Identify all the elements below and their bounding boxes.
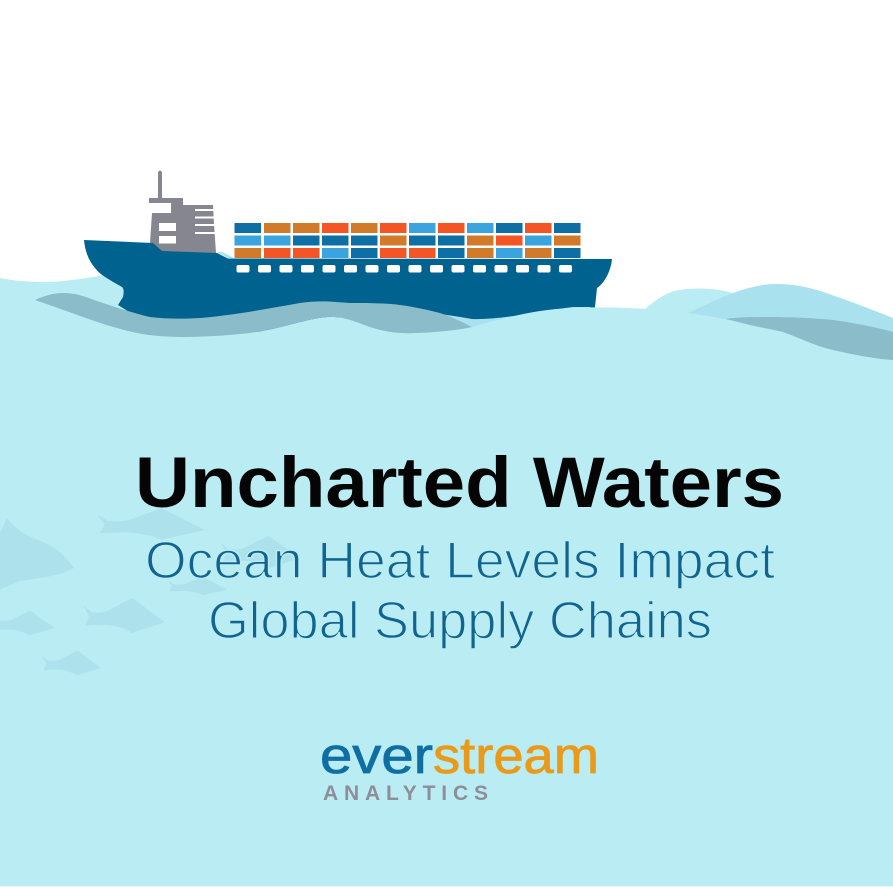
containers <box>234 223 580 258</box>
dark wave under ship <box>35 293 472 337</box>
light strip below hull <box>340 303 590 345</box>
fish: bottom small <box>42 651 101 675</box>
bridge windows <box>149 203 176 244</box>
school of fish <box>0 508 301 675</box>
logo word: ever: ever <box>320 727 433 784</box>
logo word: analytics: ANALYTICS <box>323 782 488 805</box>
fish: left small <box>0 611 55 635</box>
ship superstructure <box>149 170 216 253</box>
fish: centre <box>83 598 165 633</box>
subtitle <box>145 532 776 650</box>
bottom edge line <box>0 886 893 887</box>
logo word: stream: stream <box>433 727 599 784</box>
fish: large at left edge <box>0 518 74 590</box>
deck wedge <box>217 252 234 258</box>
tower vents <box>195 209 216 234</box>
subtitle line 1: Ocean Heat Levels Impact <box>145 532 776 590</box>
container ship <box>84 170 612 335</box>
back wave: left and right light water <box>0 274 760 340</box>
ship hull <box>84 240 612 335</box>
subtitle line 2: Global Supply Chains <box>208 592 712 650</box>
logo: everstream analytics <box>320 727 599 805</box>
front water <box>0 293 893 887</box>
fish: behind Ocean <box>168 577 227 595</box>
hull portholes <box>236 265 572 272</box>
fish: behind first line of text <box>220 536 301 568</box>
fish: upper <box>97 508 205 540</box>
back wave: dark swell on right <box>725 317 893 362</box>
title: Uncharted Waters <box>135 444 784 523</box>
back wave: mid blue swell <box>688 284 893 365</box>
